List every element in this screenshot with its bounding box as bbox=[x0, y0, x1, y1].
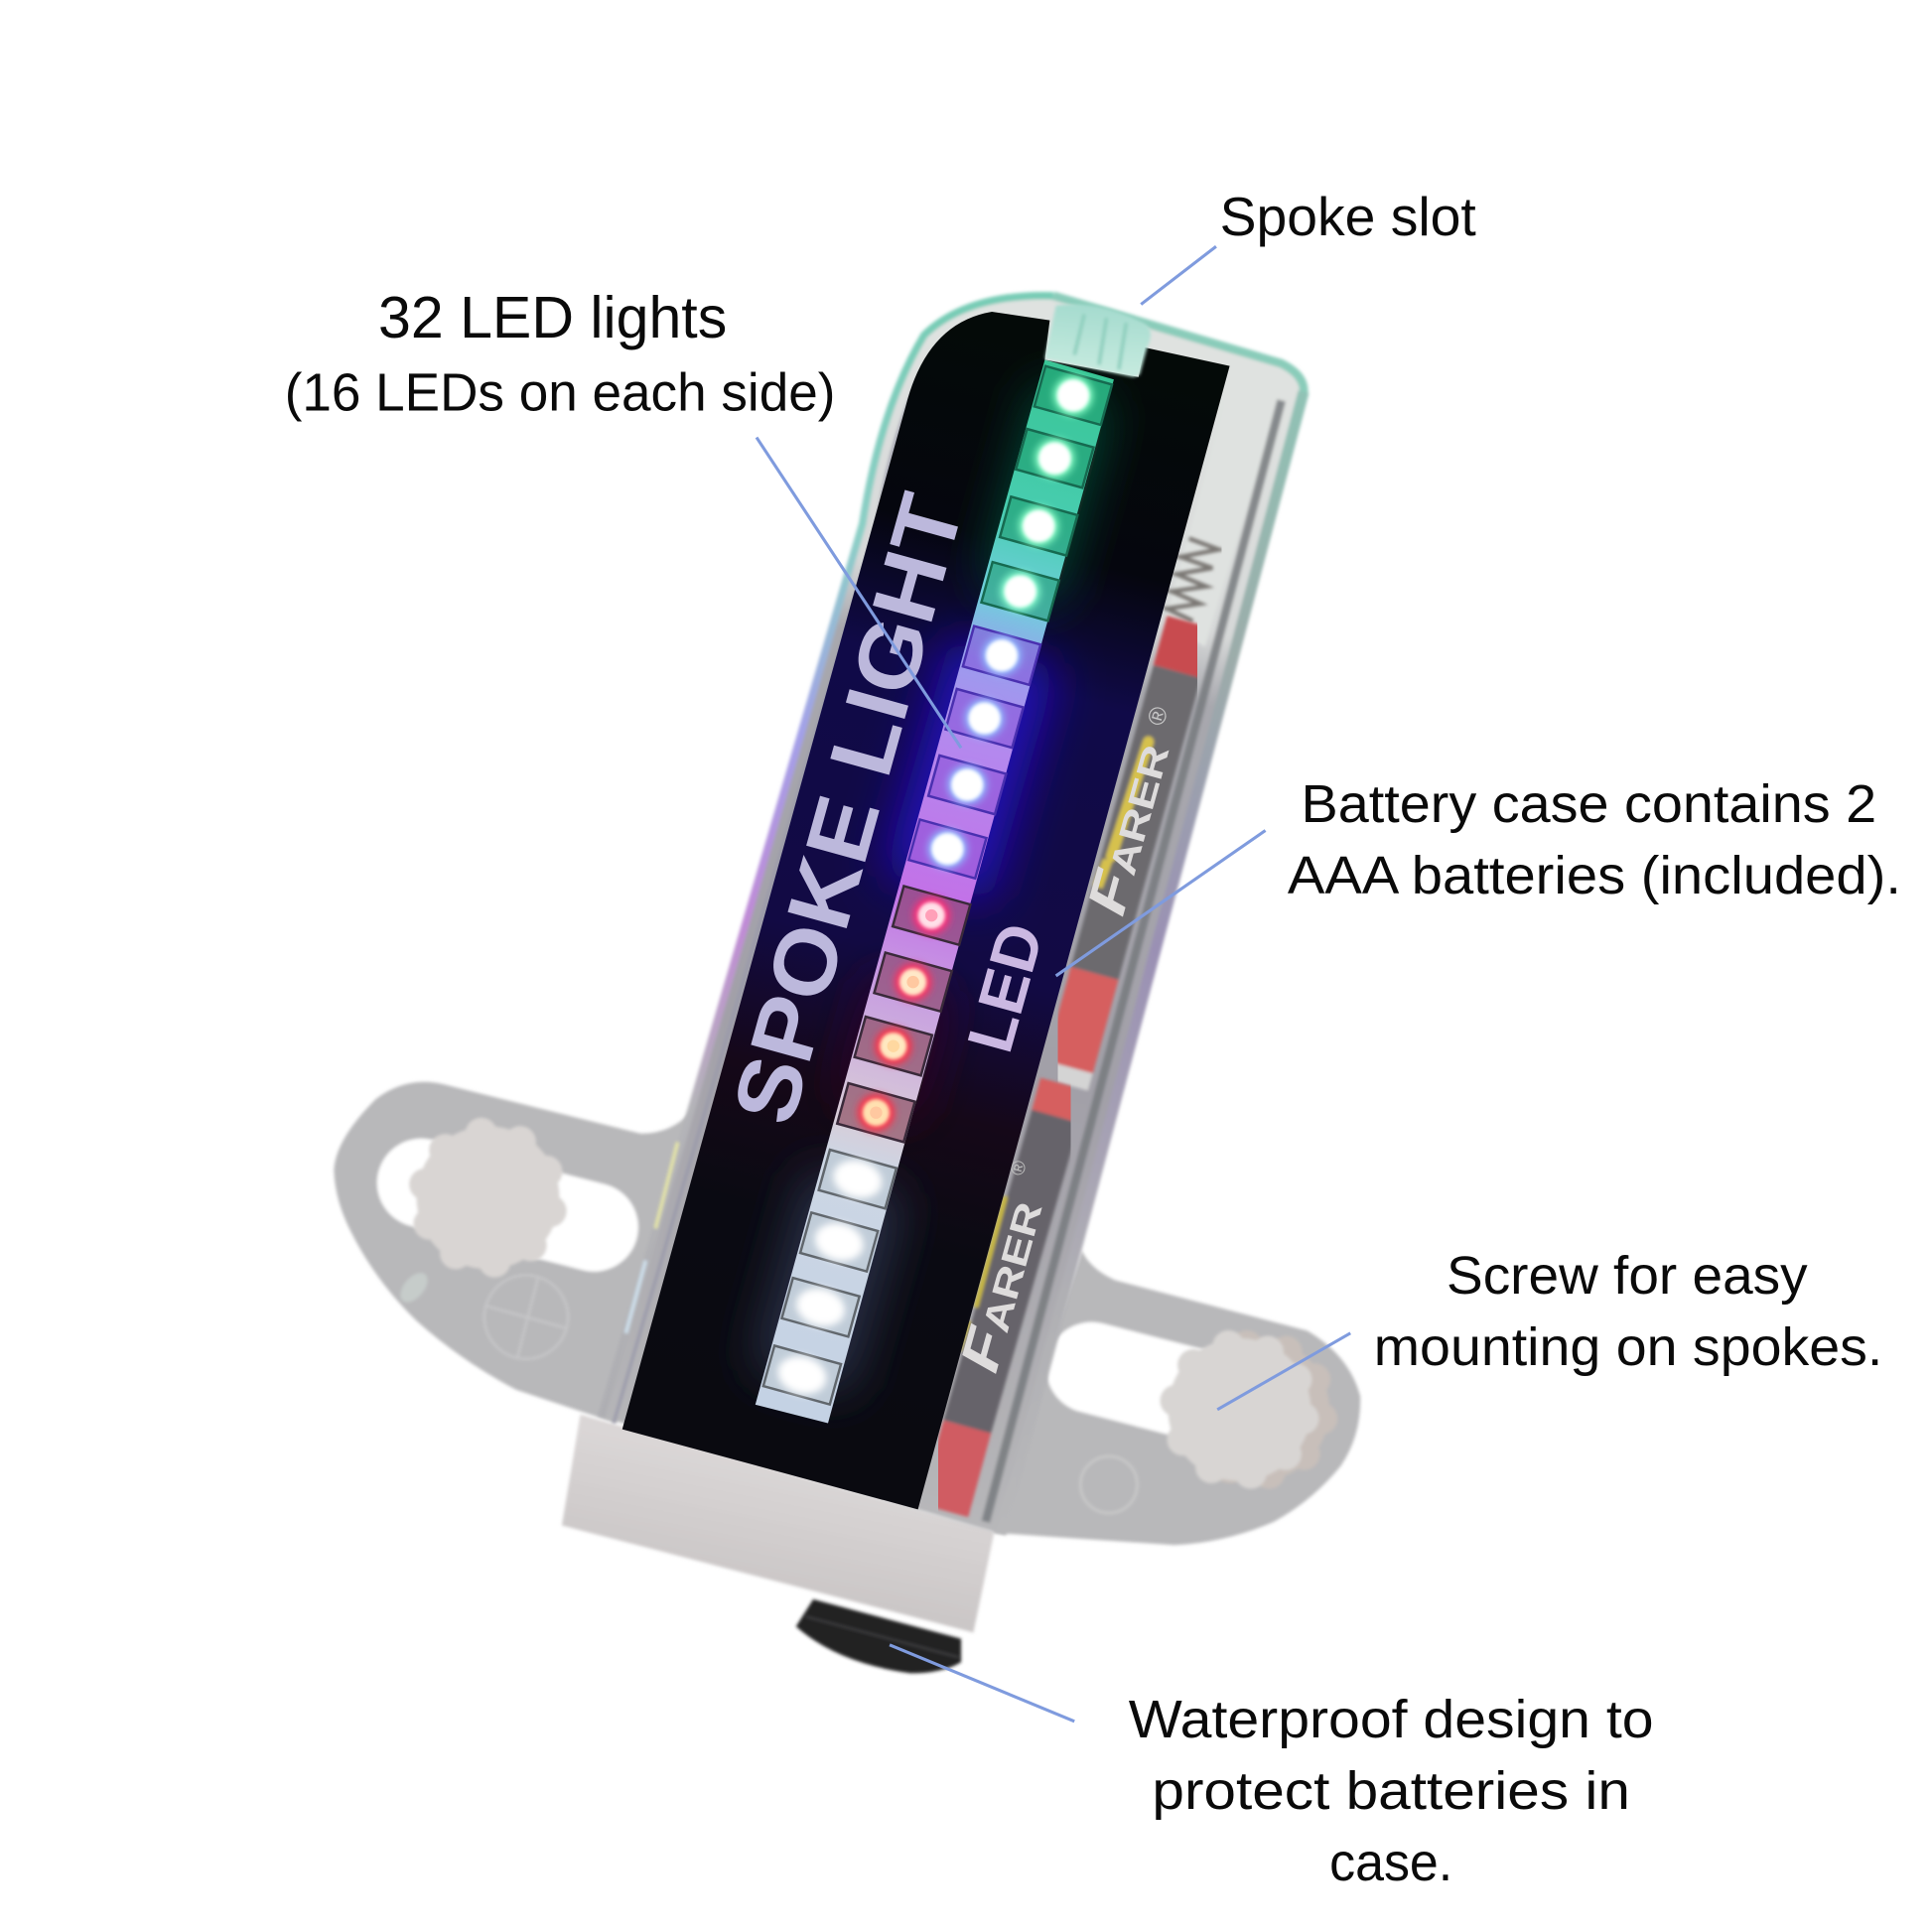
label: waterproof: protect batteries in bbox=[1152, 1762, 1630, 1821]
label: spoke slot: Spoke slot bbox=[1220, 187, 1476, 247]
callout line: waterproof bbox=[890, 1645, 1074, 1722]
LED row bbox=[763, 366, 1112, 1405]
callout line: LED lights bbox=[757, 438, 961, 748]
label: battery case: Battery case contains 2 bbox=[1302, 775, 1876, 834]
glow on panel bbox=[801, 394, 1074, 1380]
label: 32 LED lights: 32 LED lights bbox=[378, 284, 727, 350]
label: waterproof: Waterproof design to bbox=[1129, 1691, 1654, 1749]
label: waterproof bbox=[1129, 1691, 1654, 1892]
label: battery case bbox=[1288, 775, 1901, 905]
printed text: LED: LED bbox=[954, 916, 1057, 1059]
green LEDs bbox=[981, 366, 1112, 621]
LED strip bbox=[756, 359, 1114, 1423]
spoke slot clear block bbox=[1044, 304, 1151, 377]
callout line: battery case bbox=[1056, 830, 1266, 976]
infographic canvas bbox=[288, 197, 1896, 1880]
label: waterproof: case. bbox=[1329, 1834, 1452, 1892]
label: screw: Screw for easy bbox=[1447, 1247, 1808, 1306]
battery two bbox=[944, 1084, 1064, 1511]
black label panel bbox=[622, 312, 1230, 1509]
registered mark: upper: ® bbox=[1143, 704, 1173, 729]
spring bbox=[1167, 538, 1218, 621]
end cap bbox=[562, 1415, 995, 1632]
label: 32 LED lights bbox=[285, 284, 835, 422]
callout line: screw bbox=[1217, 1333, 1350, 1410]
rubber knob bbox=[796, 1599, 961, 1673]
red LEDs bbox=[837, 886, 970, 1142]
screw: right back edge bbox=[1168, 1322, 1348, 1497]
printed text: SPOKE LIGHT: SPOKE LIGHT bbox=[714, 483, 982, 1134]
screw: left bbox=[393, 1106, 582, 1290]
right mounting bracket bbox=[993, 1251, 1360, 1545]
label: screw bbox=[1374, 1247, 1882, 1377]
left mounting bracket bbox=[334, 1082, 691, 1423]
screw: right bbox=[1150, 1322, 1329, 1497]
label: screw: mounting on spokes. bbox=[1374, 1318, 1882, 1377]
callout line: spoke slot bbox=[1141, 246, 1216, 305]
battery brand: upper: FARER bbox=[1075, 737, 1180, 921]
blue LEDs bbox=[908, 626, 1040, 879]
product illustration: LED spoke light bbox=[334, 296, 1360, 1673]
label: battery case: AAA batteries (included). bbox=[1288, 847, 1901, 905]
battery brand: lower: FARER bbox=[949, 1193, 1053, 1378]
label: 32 LED lights: (16 LEDs on each side) bbox=[285, 363, 835, 422]
white LEDs bbox=[763, 1150, 897, 1405]
battery one bbox=[1064, 622, 1190, 1084]
AAA batteries bbox=[944, 622, 1190, 1511]
registered mark: lower: ® bbox=[1007, 1158, 1032, 1178]
clear casing bbox=[602, 296, 1304, 1534]
